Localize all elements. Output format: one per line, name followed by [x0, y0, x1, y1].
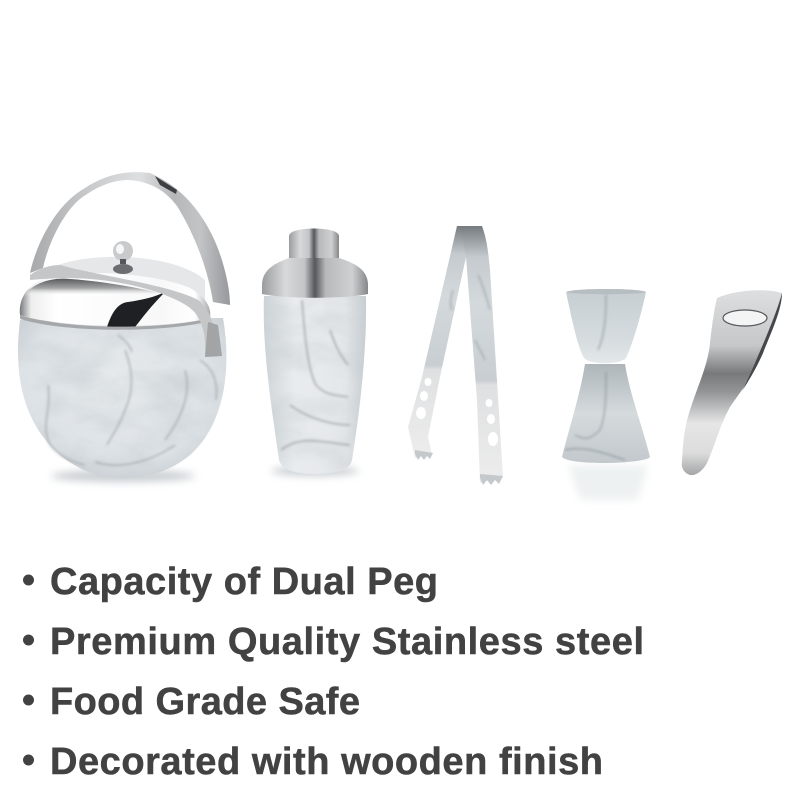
handle strap over lid [30, 265, 222, 357]
lid knob [113, 241, 133, 274]
jigger veins [565, 295, 625, 460]
bullet: wooden finish: Decorated with wooden finish [50, 741, 603, 783]
jigger rim [566, 289, 646, 294]
lid rim [20, 315, 210, 330]
dome dark band [24, 279, 160, 296]
bullet: stainless steel: Premium Quality Stainless steel [50, 621, 644, 663]
rear lid [48, 257, 205, 300]
bucket body [18, 318, 226, 478]
handle highlight [155, 176, 177, 194]
product: cocktail shaker [262, 228, 368, 476]
shaker veins [281, 300, 350, 450]
lid dome [20, 273, 210, 326]
product: bottle opener spoon [682, 290, 782, 475]
bucket shadow [51, 470, 195, 482]
body marble clouds [18, 318, 226, 478]
lid reflection [107, 292, 165, 327]
shaker shoulder [262, 258, 368, 298]
bucket handle arc [30, 172, 230, 305]
opener blade [682, 290, 782, 475]
bullet: capacity: Capacity of Dual Peg [50, 561, 438, 603]
product: ice bucket [18, 172, 230, 482]
tong teeth [415, 450, 503, 485]
shaker body [264, 296, 366, 474]
bullet: food grade: Food Grade Safe [50, 681, 360, 723]
shaker clouds [264, 296, 366, 474]
shaker cap [289, 228, 339, 265]
opener edge [742, 293, 782, 391]
product: tongs [408, 226, 503, 485]
tong right arm [460, 226, 503, 483]
tong marble veins [451, 275, 490, 360]
tong holes [416, 378, 498, 446]
body marble veins [46, 335, 217, 465]
jigger upper cone [566, 289, 646, 363]
jigger reflection [568, 465, 648, 500]
feature list [23, 561, 644, 783]
shaker shadow [271, 466, 359, 476]
opener hole [723, 310, 767, 326]
tong left arm [408, 226, 466, 458]
product: jigger [562, 289, 650, 500]
strap end [205, 322, 222, 357]
jigger lower cone [562, 364, 650, 463]
